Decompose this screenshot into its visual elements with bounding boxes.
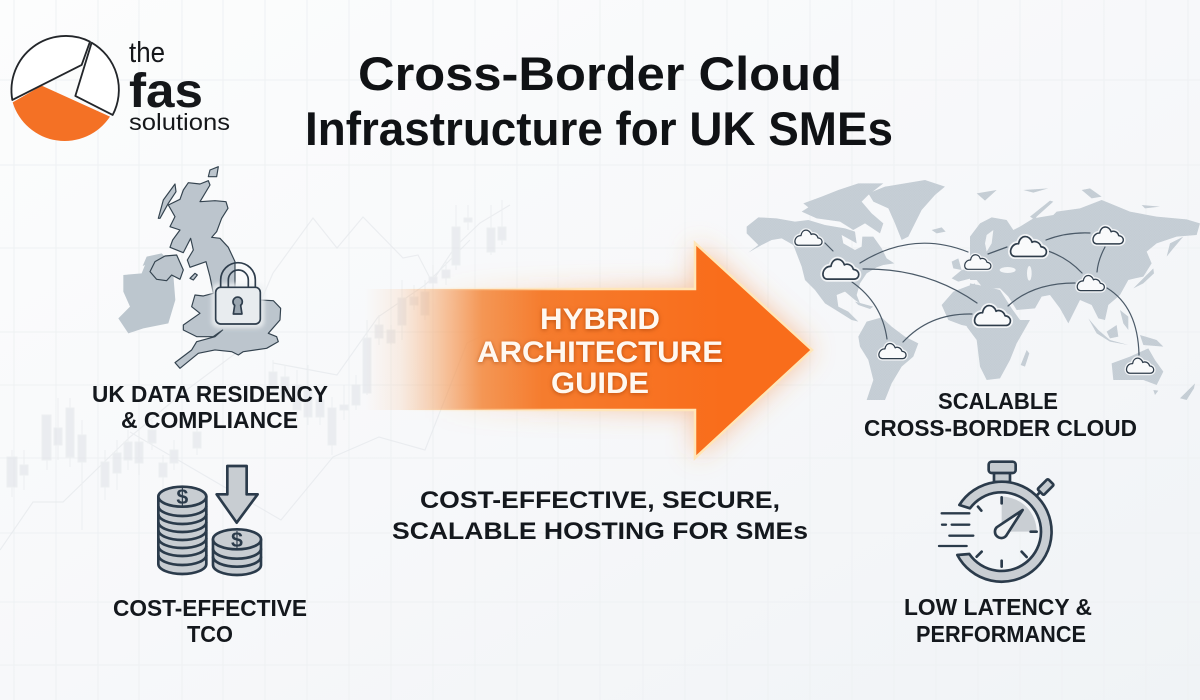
cloud outlines (795, 227, 1154, 373)
network links (825, 233, 1139, 355)
arrow label: GUIDE (551, 367, 649, 400)
label: scalable cross-border cloud (864, 388, 1137, 441)
label: cost-effective TCO: TCO (187, 621, 233, 647)
label: scalable cross-border cloud: SCALABLE (938, 388, 1058, 414)
down arrow (217, 466, 258, 523)
logo wordmark: fas (129, 65, 203, 118)
label: UK data residency (92, 381, 328, 433)
label: low latency and performance: LOW LATENCY & (904, 594, 1092, 620)
logo mark (11, 36, 119, 141)
icon: coins with down arrow (158, 466, 261, 575)
logo wordmark (129, 37, 230, 135)
title (305, 47, 893, 155)
tall coin stack: $ (176, 485, 188, 509)
title: Cross-Border Cloud (358, 47, 842, 100)
stopwatch crown (989, 462, 1054, 496)
arrow label: ARCHITECTURE (477, 336, 723, 369)
background financial chart (0, 200, 510, 550)
icon: stopwatch (939, 462, 1054, 582)
Northern Ireland (150, 255, 183, 281)
cloud halos (795, 227, 1154, 373)
arrow body (365, 243, 812, 458)
cloud nodes (795, 227, 1154, 373)
speed lines (939, 513, 973, 546)
logo wordmark: solutions (129, 109, 230, 135)
arrow glow (430, 243, 812, 458)
label: UK data residency: & COMPLIANCE (121, 407, 298, 433)
label: low latency and performance: PERFORMANCE (916, 621, 1086, 647)
subtitle: COST-EFFECTIVE, SECURE, (420, 487, 780, 514)
continents (747, 180, 1200, 400)
label: low latency and performance (904, 594, 1092, 647)
logo wordmark: the (129, 37, 165, 69)
Ireland (118, 253, 175, 333)
world map with cloud network (747, 180, 1200, 400)
central arrow (365, 243, 812, 458)
label: UK data residency: UK DATA RESIDENCY (92, 381, 328, 407)
title: Infrastructure for UK SMEs (305, 102, 893, 155)
Great Britain (168, 181, 281, 368)
arrow label: HYBRID (540, 303, 660, 336)
Scottish islands (158, 167, 218, 280)
short coin stack: $ (231, 528, 243, 552)
subtitle: SCALABLE HOSTING FOR SMEs (392, 518, 808, 545)
logo (11, 36, 230, 141)
padlock (212, 263, 264, 328)
label: cost-effective TCO (113, 595, 307, 647)
icon: UK map with padlock (118, 167, 281, 368)
arrow label (477, 303, 723, 400)
stopwatch dial (957, 482, 1052, 582)
label: cost-effective TCO: COST-EFFECTIVE (113, 595, 307, 621)
subtitle (392, 487, 808, 545)
label: scalable cross-border cloud: CROSS-BORDER CLOUD (864, 415, 1137, 441)
